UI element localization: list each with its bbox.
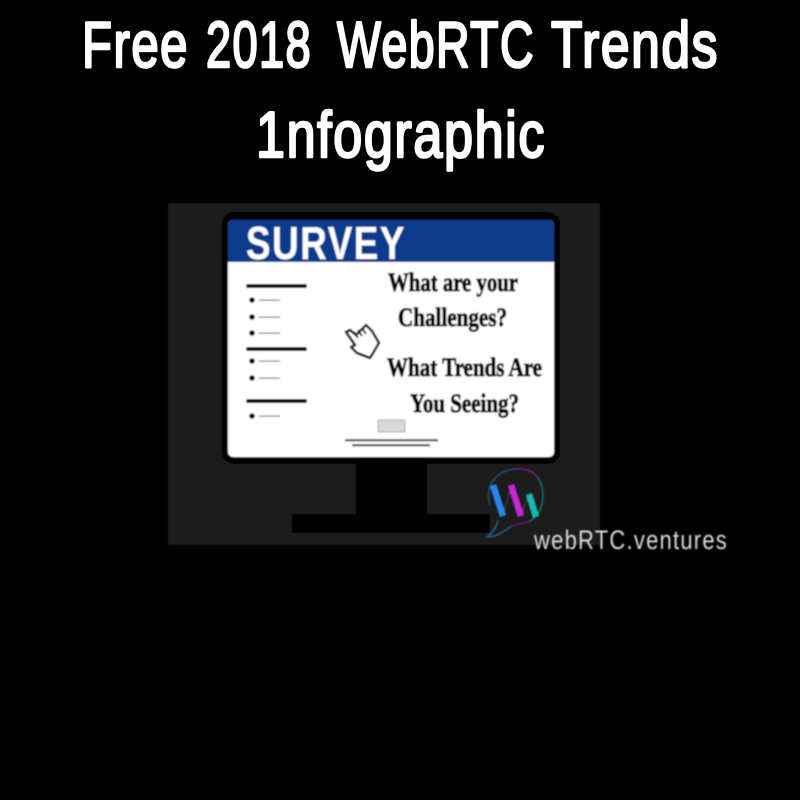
survey header: SURVEY (246, 217, 406, 269)
title: 1nfographic (256, 98, 546, 171)
title: Free (82, 8, 189, 81)
survey questions: Challenges? (398, 303, 507, 332)
title: Trends (551, 8, 719, 81)
logo wordmark: webRTC.ventures (533, 525, 728, 555)
survey questions: What Trends Are (387, 353, 542, 382)
panel: survey illustration (168, 203, 600, 545)
survey questions: What are your (388, 268, 518, 297)
logo: webRTC.ventures (487, 469, 728, 555)
survey questions (387, 268, 542, 418)
survey header (228, 217, 554, 269)
icon: pointing hand (346, 325, 379, 358)
survey checklist (246, 284, 307, 419)
monitor screen (228, 220, 554, 457)
title: WebRTC (337, 8, 535, 81)
monitor stand (292, 460, 490, 533)
title (82, 8, 719, 171)
logo speech bubble (487, 469, 543, 537)
monitor frame (222, 212, 560, 464)
submit button (378, 420, 405, 432)
footer lines (345, 439, 438, 446)
logo W mark (493, 485, 536, 517)
title: 2018 (206, 8, 312, 81)
survey questions: You Seeing? (410, 389, 519, 418)
